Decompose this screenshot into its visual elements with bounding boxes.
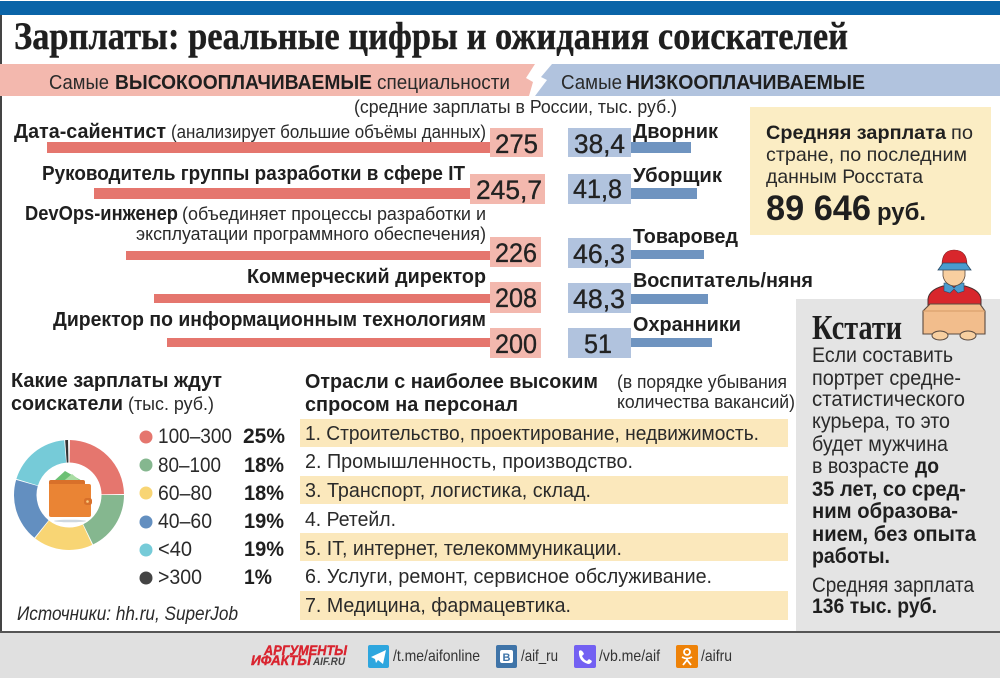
panel: by the way, courier portrait [796, 299, 1000, 632]
legend row under 40 [140, 538, 284, 561]
footer [0, 631, 1000, 678]
list: industries: 3. Транспорт, логистика, склад. [305, 479, 591, 502]
chart: lowest paid professions [568, 121, 813, 359]
legend row over 300: >300 [158, 566, 202, 589]
heading: industries in demand [305, 370, 795, 416]
row: commercial director: Коммерческий директор [247, 266, 486, 288]
panel: by the way, courier portrait: 35 лет, со сред- [812, 477, 966, 501]
row: janitor [568, 121, 719, 159]
panel: by the way, courier portrait: курьера, то это [812, 409, 950, 433]
panel: by the way, courier portrait: ним образова- [812, 499, 958, 523]
social: vk: /aif_ru [521, 648, 558, 665]
legend row 40–60: 19% [244, 510, 284, 533]
row: cleaner [568, 165, 723, 204]
legend row 60–80: 60–80 [158, 482, 212, 505]
row: IT team lead [42, 163, 545, 205]
row: data scientist: 275 [495, 129, 538, 159]
top blue band [0, 1, 1000, 15]
legend row under 40: 19% [244, 538, 284, 561]
row: nanny: Воспитатель/няня [633, 270, 813, 292]
panel: average salary: стране, по последним [766, 144, 967, 166]
highest paid heading: специальности [377, 71, 510, 94]
panel: average salary: 89 646 [766, 189, 871, 228]
row: CIO [53, 309, 541, 359]
lowest paid heading: НИЗКООПЛАЧИВАЕМЫЕ [626, 71, 865, 94]
list: industries: 6. Услуги, ремонт, сервисное обслуживание. [305, 565, 712, 588]
social: viber: /vb.me/aif [599, 648, 660, 665]
row: security guards: 51 [584, 329, 612, 359]
units note: (средние зарплаты в России, тыс. руб.) [354, 97, 677, 117]
legend row 80–100: 80–100 [158, 454, 221, 477]
social: odnoklassniki [676, 645, 732, 668]
legend row 100–300 [140, 425, 285, 448]
header strip: highest and lowest paid [0, 64, 1000, 96]
row: data scientist: (анализирует большие объёмы данных) [171, 121, 486, 142]
social: viber [574, 645, 660, 668]
panel: average salary: данным Росстата [766, 166, 923, 188]
list: industries: 2. Промышленность, производство. [305, 450, 633, 473]
row: merchandiser [568, 226, 738, 269]
row: commercial director: 208 [495, 283, 537, 313]
social: odnoklassniki: /aifru [701, 648, 732, 665]
row: merchandiser: Товаровед [633, 226, 738, 248]
heading: expected salaries: Какие зарплаты ждут [11, 369, 222, 392]
panel: by the way, courier portrait: Средняя зарплата [812, 573, 974, 597]
heading: industries in demand: (в порядке убывания [617, 372, 787, 392]
title: Зарплаты: реальные цифры и ожидания соискателей [14, 14, 848, 58]
social: telegram [368, 645, 480, 668]
logo: AIF.RU [312, 656, 346, 668]
logo [251, 643, 347, 668]
row: IT team lead: 245,7 [476, 175, 542, 205]
panel: average salary: Средняя зарплата [766, 122, 946, 144]
row: CIO: 200 [495, 329, 537, 359]
row: DevOps engineer: 226 [495, 238, 537, 268]
panel: by the way, courier portrait: статистического [812, 387, 965, 411]
heading: expected salaries: соискатели [11, 392, 123, 415]
row: cleaner: Уборщик [633, 165, 723, 187]
legend row under 40: <40 [158, 538, 192, 561]
list: industries: 5. IT, интернет, телекоммуникации. [305, 537, 622, 560]
row: commercial director [154, 266, 541, 313]
highest paid heading: Самые [49, 71, 109, 94]
legend row over 300 [140, 566, 272, 589]
legend row 60–80: 18% [244, 482, 284, 505]
row: data scientist [14, 121, 543, 159]
heading: expected salaries: (тыс. руб.) [128, 394, 214, 414]
heading: industries in demand: спросом на персонал [305, 393, 518, 416]
row: security guards: Охранники [633, 314, 741, 336]
chart: highest paid professions [14, 121, 545, 359]
row: DevOps engineer [25, 203, 541, 268]
list: industries: 7. Медицина, фармацевтика. [305, 594, 571, 617]
logo: ИФАКТЫ [251, 653, 311, 668]
legend row 40–60: 40–60 [158, 510, 212, 533]
row: janitor: Дворник [633, 121, 719, 143]
social: vk: В [503, 652, 511, 664]
heading: industries in demand: количества вакансий) [617, 392, 795, 412]
panel: average salary: руб. [877, 199, 926, 226]
highest paid heading [49, 71, 510, 94]
social: telegram: /t.me/aifonline [393, 648, 480, 665]
panel: by the way, courier portrait: нием, без опыта [812, 522, 977, 546]
row: DevOps engineer: (объединяет процессы разработки и [182, 203, 486, 224]
row: CIO: Директор по информационным технологиям [53, 309, 486, 331]
row: cleaner: 41,8 [573, 174, 622, 204]
donut chart: expected salaries [14, 440, 124, 550]
row: merchandiser: 46,3 [573, 239, 625, 269]
legend row 80–100 [140, 454, 284, 477]
lowest paid heading: Самые [561, 71, 622, 94]
panel: by the way, courier portrait: Кстати [812, 308, 902, 347]
panel: by the way, courier portrait: 136 тыс. руб. [812, 594, 937, 618]
row: DevOps engineer: DevOps-инженер [25, 203, 178, 225]
legend row 100–300: 25% [243, 425, 285, 448]
row: DevOps engineer: эксплуатации программного обеспечения) [136, 223, 486, 244]
panel: average salary: по [951, 122, 973, 144]
highest paid band [0, 64, 535, 96]
heading: industries in demand: Отрасли с наиболее высоким [305, 370, 598, 393]
legend row 60–80 [140, 482, 284, 505]
panel: by the way, courier portrait: до [915, 454, 939, 478]
legend row over 300: 1% [244, 566, 272, 589]
row: nanny: 48,3 [573, 284, 625, 314]
logo: АРГУМЕНТЫ [263, 643, 347, 658]
panel: by the way, courier portrait: Если составить [812, 343, 953, 367]
legend: expected salaries [140, 425, 285, 589]
legend row 80–100: 18% [244, 454, 284, 477]
list: industries: 1. Строительство, проектирование, недвижимость. [305, 422, 759, 445]
legend row 40–60 [140, 510, 284, 533]
panel: by the way, courier portrait: работы. [812, 544, 890, 568]
heading: expected salaries [11, 369, 222, 415]
panel: average salary [750, 107, 991, 235]
row: security guards [568, 314, 741, 359]
source note: Источники: hh.ru, SuperJob [17, 604, 238, 625]
list: industries: 4. Ретейл. [305, 508, 396, 531]
row: janitor: 38,4 [574, 129, 625, 159]
list: industries [300, 419, 788, 620]
panel: by the way, courier portrait: будет мужчина [812, 432, 948, 456]
panel: by the way, courier portrait: портрет средне- [812, 366, 961, 390]
social: vk [496, 645, 558, 668]
row: nanny [568, 270, 813, 314]
icon: wallet [49, 471, 92, 522]
highest paid heading: ВЫСОКООПЛАЧИВАЕМЫЕ [115, 71, 372, 94]
lowest paid band [535, 64, 1000, 96]
icon: courier with box [923, 250, 985, 340]
legend row 100–300: 100–300 [158, 425, 232, 448]
panel: by the way, courier portrait: в возрасте [812, 454, 909, 478]
row: data scientist: Дата-сайентист [14, 121, 166, 143]
row: IT team lead: Руководитель группы разработки в сфере IT [42, 163, 465, 185]
